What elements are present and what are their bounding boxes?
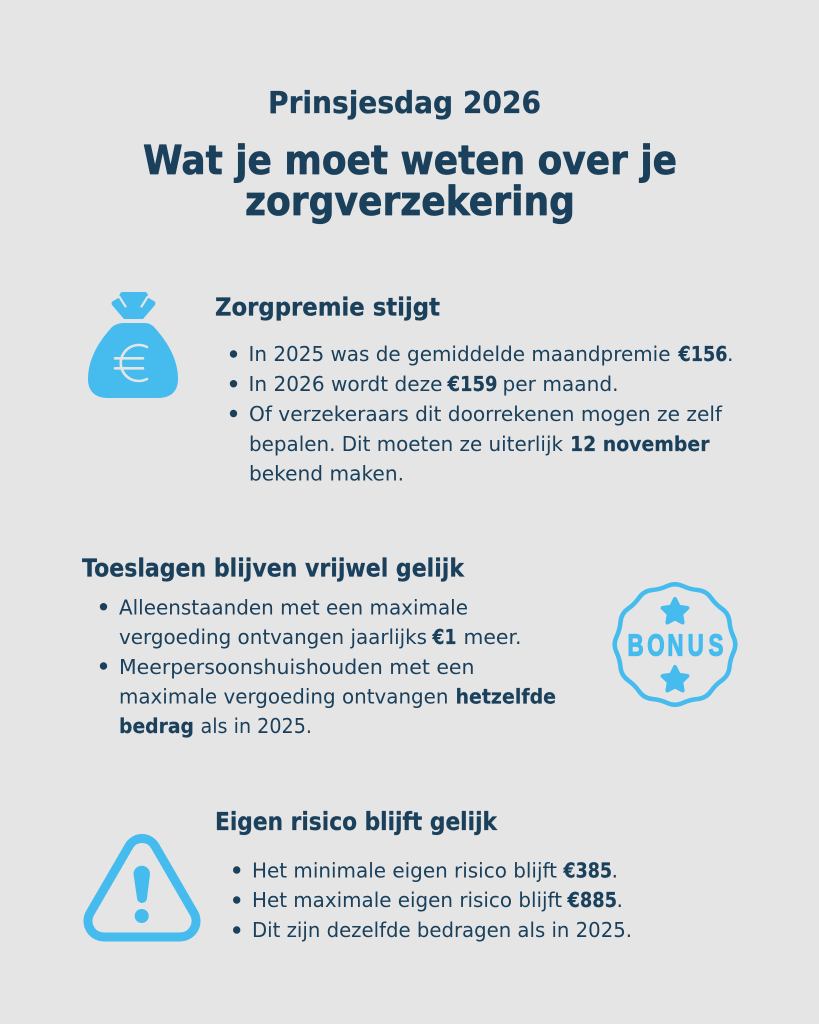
- icon: bonus badge: BONUS: [627, 628, 723, 662]
- main title: zorgverzekering: [245, 179, 575, 225]
- bullet list: zorgpremie: Of verzekeraars dit doorrekenen mogen ze zelf: [249, 402, 723, 426]
- bullet list: toeslagen: Alleenstaanden met een maximale: [119, 596, 468, 620]
- icon: bonus badge: [615, 584, 735, 705]
- bullet list: toeslagen: bedrag: [119, 714, 194, 738]
- panel: toeslagen: [82, 554, 735, 738]
- bullet list: toeslagen: maximale vergoeding ontvangen: [119, 685, 448, 709]
- bullet list: zorgpremie: bepalen. Dit moeten ze uiterlijk: [249, 432, 563, 456]
- heading: eigen risico: Eigen risico blijft gelijk: [215, 807, 498, 836]
- bullet list: zorgpremie: 12 november: [570, 432, 710, 456]
- bullet list: zorgpremie: In 2025 was de gemiddelde maandpremie: [248, 342, 670, 366]
- bullet list: eigen risico: Het minimale eigen risico blijft: [252, 858, 557, 882]
- icon: warning triangle: [88, 839, 196, 937]
- bullet list: zorgpremie: €156: [678, 342, 728, 366]
- heading: toeslagen: Toeslagen blijven vrijwel gelijk: [82, 554, 465, 582]
- icon: money bag: [88, 292, 178, 398]
- panel: eigen risico: [88, 807, 632, 942]
- bullet list: toeslagen: [100, 596, 556, 738]
- bullet list: eigen risico: Het maximale eigen risico blijft: [252, 888, 562, 912]
- bullet list: eigen risico: [233, 858, 632, 942]
- bullet list: zorgpremie: per maand.: [502, 372, 618, 396]
- bullet list: toeslagen: vergoeding ontvangen jaarlijks: [119, 625, 427, 649]
- bullet list: eigen risico: .: [612, 858, 618, 882]
- bullet list: toeslagen: hetzelfde: [456, 685, 556, 709]
- bullet list: zorgpremie: €159: [447, 372, 498, 396]
- bullet list: eigen risico: €385: [563, 858, 612, 882]
- bullet list: toeslagen: als in 2025.: [200, 714, 312, 738]
- bullet list: toeslagen: €1: [432, 625, 456, 649]
- bullet list: zorgpremie: .: [727, 342, 734, 366]
- bullet list: zorgpremie: In 2026 wordt deze: [248, 372, 442, 396]
- bullet list: eigen risico: .: [616, 888, 623, 912]
- heading: zorgpremie stijgt: Zorgpremie stijgt: [215, 292, 440, 322]
- bullet list: toeslagen: Meerpersoonshuishouden met een: [119, 655, 474, 679]
- title block: [143, 86, 677, 225]
- bullet list: zorgpremie: bekend maken.: [249, 462, 404, 486]
- bullet list: toeslagen: meer.: [464, 625, 522, 649]
- bullet list: eigen risico: €885: [567, 888, 617, 912]
- main title: [143, 138, 677, 225]
- bullet list: zorgpremie: [230, 342, 734, 486]
- main title: Wat je moet weten over je: [143, 138, 677, 184]
- subtitle: Prinsjesdag 2026: [268, 86, 541, 121]
- bullet list: eigen risico: Dit zijn dezelfde bedragen als in 2025.: [252, 918, 632, 942]
- panel: zorgpremie: [88, 292, 734, 486]
